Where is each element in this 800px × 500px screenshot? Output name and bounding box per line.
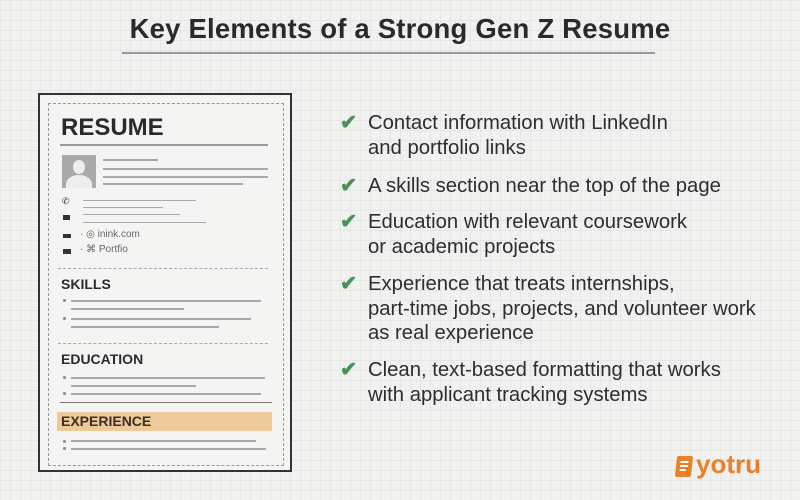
item 3: Education with relevant coursework: [368, 211, 687, 233]
item 5: [340, 359, 721, 406]
resume content: · ◎ inink.com: [80, 229, 140, 240]
item 5: Clean, text-based formatting that works: [368, 359, 721, 381]
item 2: ✔: [340, 175, 357, 197]
item 1: and portfolio links: [368, 136, 526, 158]
item 4: part-time jobs, projects, and volunteer work: [368, 298, 756, 320]
resume content: · ⌘ Portfio: [80, 244, 128, 255]
title: Key Elements of a Strong Gen Z Resume: [130, 13, 670, 44]
heading: education: EDUCATION: [61, 351, 143, 367]
icon: profile photo: [62, 155, 96, 188]
resume content: RESUME: [61, 114, 164, 141]
item 4: Experience that treats internships,: [368, 273, 675, 295]
item 5: with applicant tracking systems: [368, 384, 648, 406]
heading: experience highlighted: [57, 412, 272, 431]
item 4: [340, 273, 756, 344]
resume content: EXPERIENCE: [61, 413, 151, 429]
item 3: or academic projects: [368, 236, 555, 258]
item 4: as real experience: [368, 322, 534, 344]
item 1: ✔: [340, 112, 357, 134]
item 4: ✔: [340, 273, 357, 295]
logo: yotru: yotru: [696, 449, 761, 479]
item 3: ✔: [340, 211, 357, 233]
resume content: [57, 114, 272, 450]
resume illustration: [38, 93, 292, 472]
item 2: A skills section near the top of the page: [368, 175, 721, 197]
item 1: Contact information with LinkedIn: [368, 112, 668, 134]
item 5: ✔: [340, 359, 357, 381]
heading: skills: SKILLS: [61, 276, 111, 292]
item 1: [340, 112, 668, 158]
resume content: ✆: [62, 196, 70, 206]
item 3: [340, 211, 687, 258]
